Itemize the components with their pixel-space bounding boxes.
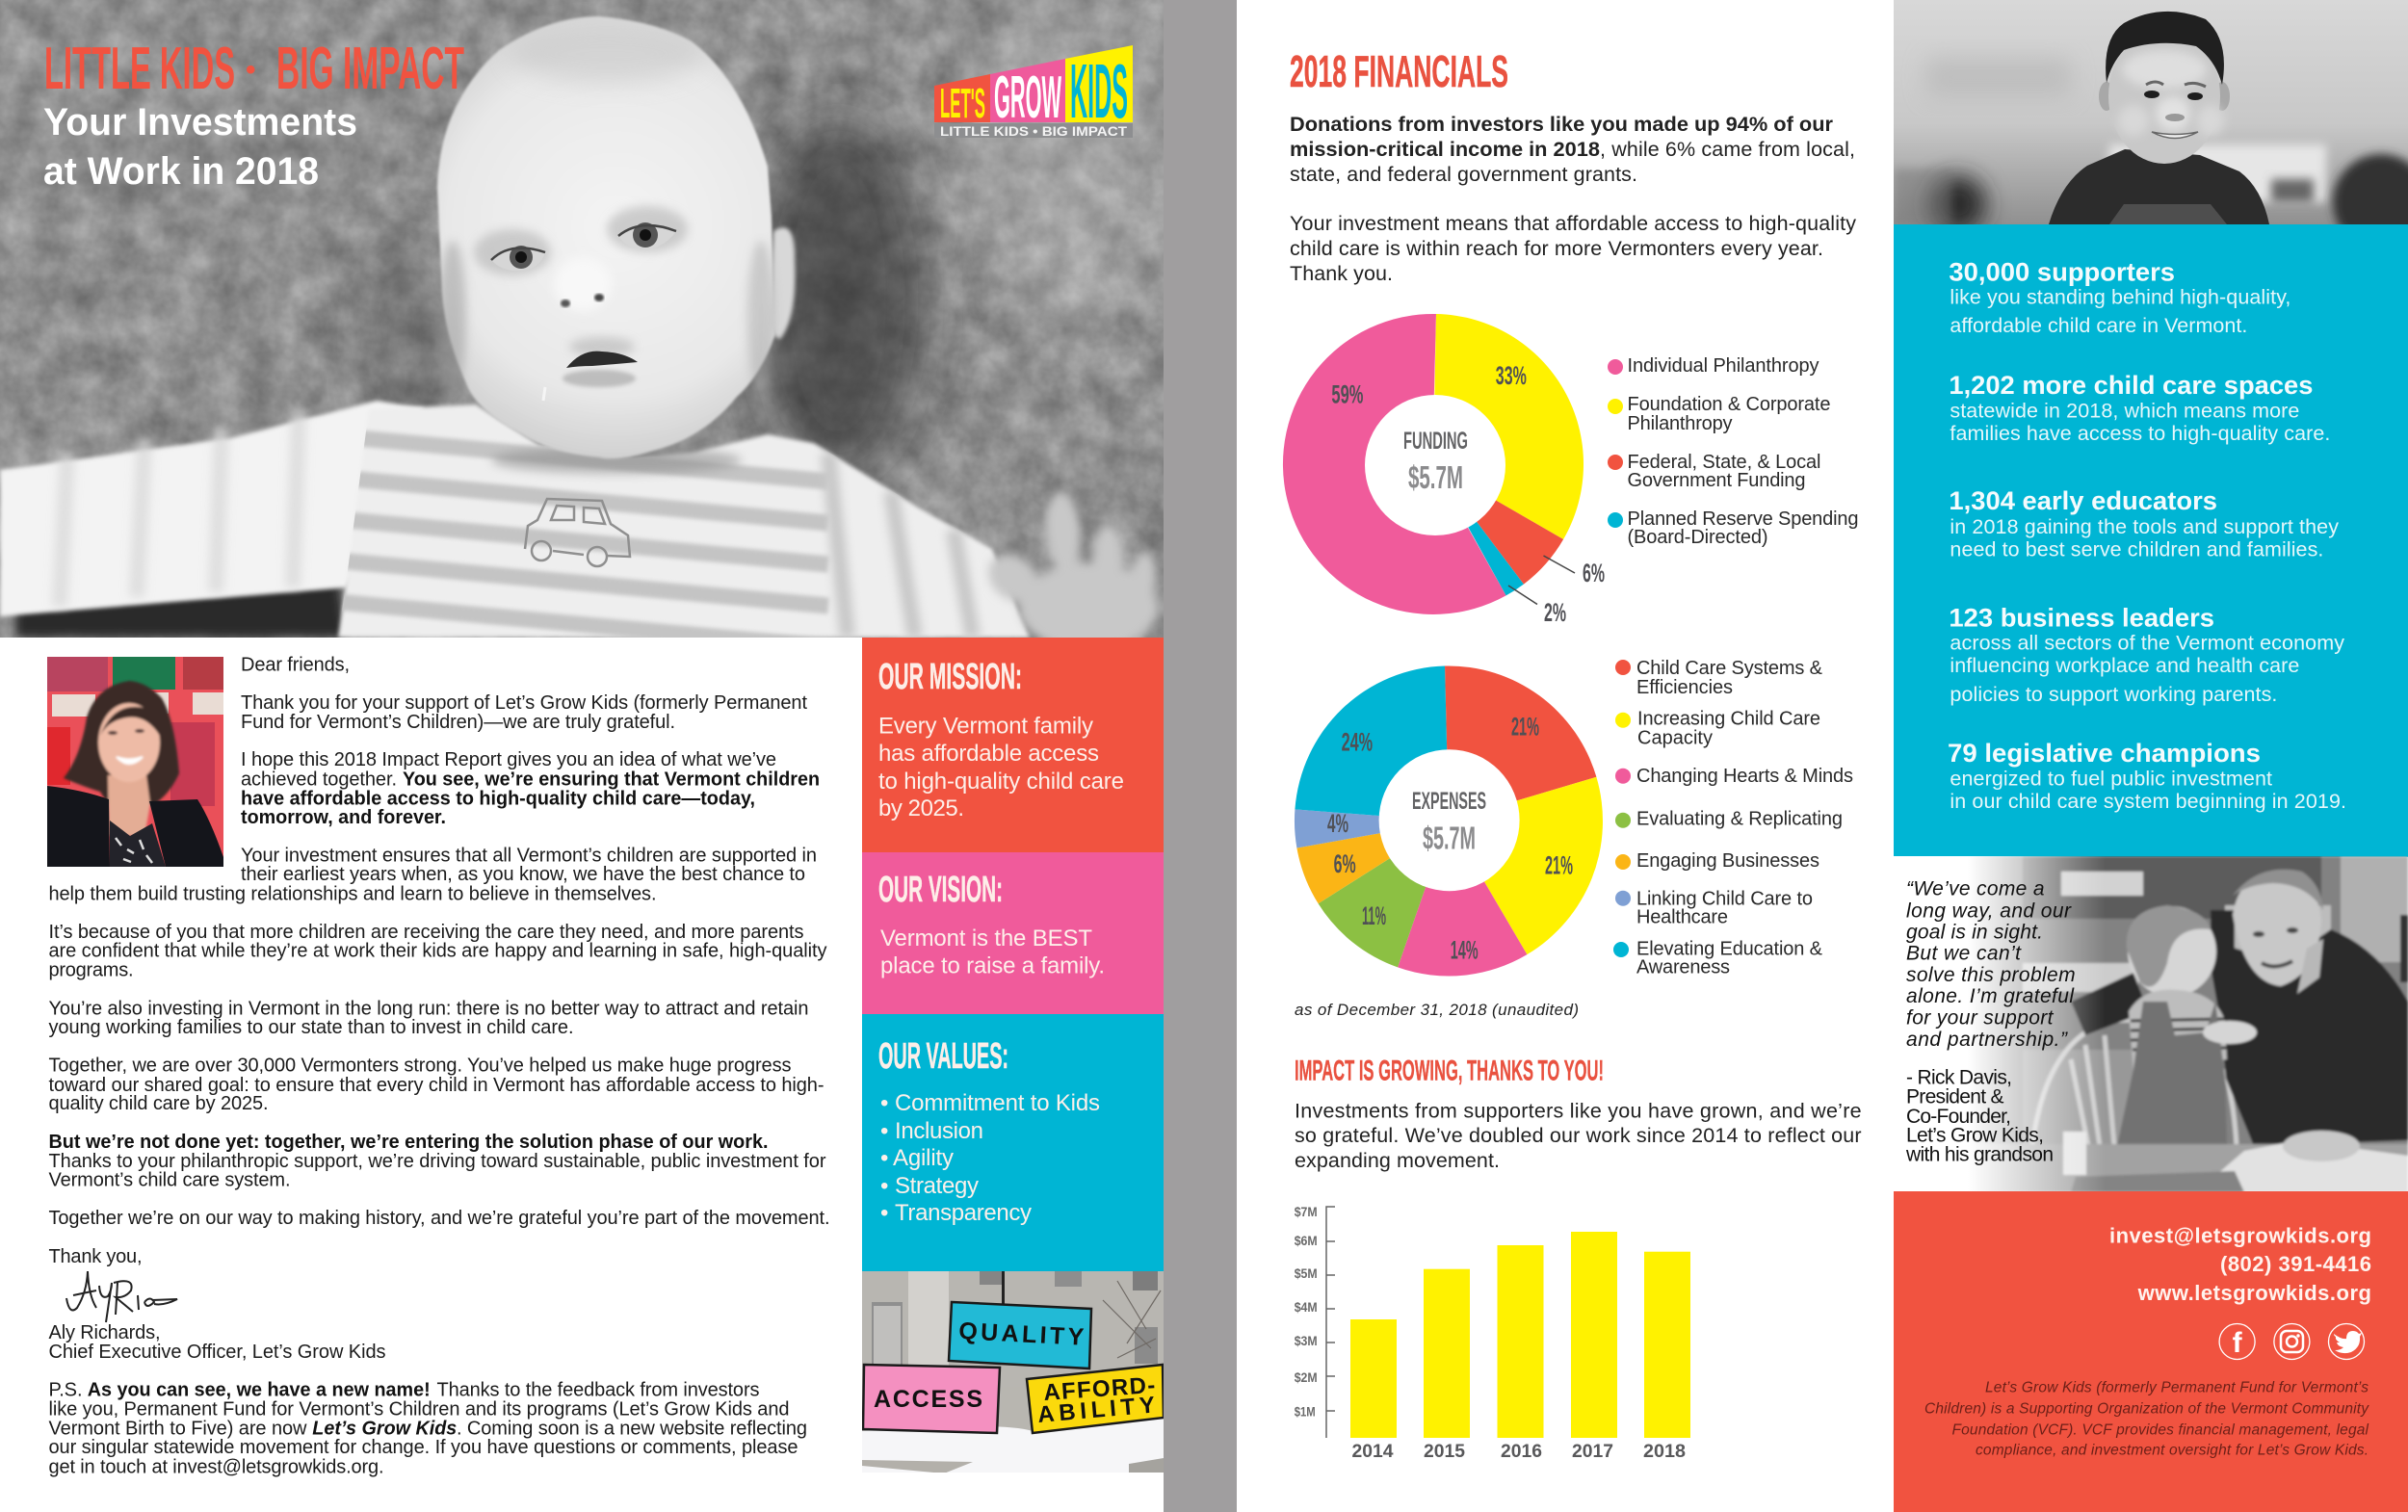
logo: Let's Grow Kids: LET'S [940, 80, 985, 127]
slice values: 24% [1342, 727, 1373, 756]
note: unaudited: as of December 31, 2018 (unaudited) [1295, 1001, 1579, 1019]
child's clothes [2129, 990, 2227, 1074]
paragraph: investing in Vermont: You’re also investing in Vermont in the long run: there is no better way to attract and retain [48, 998, 809, 1019]
paragraph: together: Together, we are over 30,000 Vermonters strong. You’ve helped us make huge progress [48, 1056, 792, 1077]
panel: our values: OUR VALUES: [878, 1036, 1008, 1077]
quote: Rick Davis: long way, and our [1906, 900, 2072, 923]
paragraph: thanks [241, 692, 807, 733]
legend: expenses: Changing Hearts & Minds [1636, 766, 1853, 787]
paragraph: solution phase [48, 1132, 826, 1191]
panel: our vision: OUR VISION: [878, 870, 1003, 910]
axis [1295, 1205, 1335, 1438]
panel: our values: Transparency [895, 1200, 1032, 1226]
stat: 123 business leaders: influencing workplace and health care [1950, 654, 2299, 677]
sign: quality: QUALITY [958, 1317, 1085, 1351]
slice values: 33% [1496, 361, 1527, 390]
postscript: Let’s Grow Kids [312, 1418, 457, 1439]
photo: baby on carpet [0, 0, 1175, 651]
sign: affordability: AFFORD- [1043, 1372, 1156, 1406]
legend: funding: Government Funding [1628, 470, 1805, 491]
attribution: Co-Founder, [1906, 1106, 2011, 1128]
axis: $6M [1295, 1234, 1318, 1248]
paragraph: solution phase: But we’re not done yet: together, we’re entering the solution phase of our work. [48, 1132, 769, 1153]
text: investments paragraph [1295, 1100, 1862, 1172]
greeting: Dear friends, [241, 655, 350, 676]
panel: our mission: Every Vermont family [878, 713, 1093, 740]
paragraph: your investment: Your investment ensures that all Vermont’s children are supported in [241, 846, 817, 867]
stat: 123 business leaders [1949, 603, 2344, 706]
quote: Rick Davis: and partnership.” [1906, 1029, 2068, 1051]
panel: our values: Inclusion [895, 1118, 983, 1144]
quote: Rick Davis: for your support [1906, 1007, 2055, 1029]
legend: expenses: Healthcare [1636, 906, 1728, 927]
legend: funding: (Board-Directed) [1628, 527, 1768, 548]
stat: 1,202 more child care spaces: statewide in 2018, which means more [1950, 399, 2299, 422]
paragraph: investing in Vermont: young working families to our state than to invest in child care. [48, 1017, 574, 1038]
stat: 1,304 early educators: 1,304 early educators [1949, 486, 2217, 515]
paragraph: impact report: You see, we’re ensuring that Vermont children [403, 769, 820, 790]
panel: contact [1894, 1191, 2408, 1512]
panel: our mission: by 2025. [878, 795, 964, 821]
disclaimer: Children) is a Supporting Organization of the Vermont Community [1924, 1401, 2369, 1418]
icon: facebook: f [2233, 1327, 2243, 1359]
stat: 1,202 more child care spaces: families have access to high-quality care. [1950, 422, 2330, 445]
text: donations paragraph: Donations from investors like you made up 94% of our [1290, 113, 1834, 136]
stat: 1,304 early educators: in 2018 gaining the tools and support they [1950, 515, 2339, 538]
portrait: Aly Richards [47, 657, 223, 867]
year labels [1352, 1442, 1686, 1462]
fade to white behind quote [1894, 856, 2106, 1192]
panel: impact statistics [1894, 224, 2408, 857]
paragraph: because of you: It’s because of you that more children are receiving the care they need, and more parents [48, 922, 803, 943]
disclaimer: compliance, and investment oversight for Let’s Grow Kids. [1976, 1443, 2369, 1459]
heading: 2018 financials: 2018 FINANCIALS [1290, 46, 1508, 96]
legend: expenses: Awareness [1636, 957, 1730, 978]
contact details [2109, 1224, 2371, 1305]
legend: expenses: Linking Child Care to [1636, 888, 1813, 909]
paragraph: making history: Together we’re on our way to making history, and we’re grateful you’re part of the movement. [48, 1208, 830, 1229]
title: Little Kids Big Impact: LITTLE KIDS [44, 36, 235, 102]
panel: our mission: OUR MISSION: [878, 657, 1022, 697]
postscript: P.S. [48, 1379, 83, 1400]
child's head [2128, 906, 2216, 997]
photo: protest signs in snow [862, 1271, 1164, 1473]
paragraph: impact report: achieved together. [241, 769, 397, 790]
sign: quality [949, 1302, 1091, 1369]
boy face [2108, 43, 2220, 164]
icon: twitter [2329, 1323, 2364, 1360]
subtitle: Your Investments [43, 101, 357, 143]
donut chart: funding [1283, 314, 1605, 627]
centre label: $5.7M [1408, 459, 1463, 495]
slice values: 21% [1511, 712, 1539, 741]
paragraph: your investment: help them build trusting relationships and learn to believe in themselves. [48, 884, 657, 905]
subtitle [43, 101, 357, 193]
stat: 79 legislative champions: 79 legislative champions [1948, 739, 2261, 768]
legend: funding: Individual Philanthropy [1628, 355, 1819, 377]
panel: our mission: has affordable access [878, 741, 1099, 767]
centre gutter [1164, 0, 1237, 1512]
contact details: (802) 391-4416 [2220, 1252, 2371, 1276]
table with map and books [2003, 1142, 2408, 1191]
centre label [1412, 788, 1486, 856]
sign: access [863, 1365, 1000, 1433]
panel: our values: • [880, 1090, 888, 1116]
legend: funding: Philanthropy [1628, 413, 1732, 434]
paragraph: impact report: I hope this 2018 Impact Report gives you an idea of what we’ve [241, 749, 776, 770]
panel: our mission: to high-quality child care [878, 769, 1124, 795]
sign: affordability [1027, 1365, 1164, 1433]
text: investments paragraph: Investments from supporters like you have grown, and we’re [1295, 1100, 1862, 1123]
text: investments paragraph: expanding movement. [1295, 1149, 1500, 1172]
panel: our values: • [880, 1200, 888, 1226]
legend: expenses: Child Care Systems & [1636, 658, 1823, 679]
stat: 79 legislative champions: in our child care system beginning in 2019. [1950, 790, 2346, 813]
legend: funding: Planned Reserve Spending [1628, 508, 1859, 530]
slice values: 6% [1583, 559, 1605, 587]
paragraph: because of you: programs. [48, 959, 133, 980]
signature scribble [66, 1271, 177, 1322]
panel: our vision: place to raise a family. [880, 953, 1105, 978]
logo: Let's Grow Kids: LITTLE KIDS • BIG IMPACT [940, 123, 1127, 139]
stat: 30,000 supporters: affordable child care in Vermont. [1950, 314, 2247, 337]
text: KIDS [1070, 48, 1128, 134]
stat: 1,304 early educators: need to best serve children and families. [1950, 537, 2323, 560]
title: Little Kids Big Impact: • [246, 54, 256, 86]
man's head [2233, 871, 2321, 986]
bars [1350, 1232, 1690, 1438]
panel: our values: Agility [893, 1145, 954, 1171]
stat: 30,000 supporters [1949, 258, 2290, 337]
text: investment paragraph: Your investment means that affordable access to high-quality [1290, 212, 1856, 235]
panel: our values: • [880, 1173, 888, 1199]
boy ears [2099, 82, 2109, 111]
axis: $1M [1295, 1404, 1316, 1420]
baby nose and mouth [543, 257, 638, 401]
quote: Rick Davis: goal is in sight. [1906, 922, 2043, 944]
legend: funding [1608, 355, 1859, 548]
stat: 79 legislative champions: energized to fuel public investment [1950, 768, 2272, 791]
year labels: 2014 [1352, 1442, 1394, 1462]
paragraph: together [48, 1056, 824, 1114]
signatory [48, 1322, 385, 1363]
quote: Rick Davis: But we can’t [1906, 943, 2022, 965]
year labels: 2015 [1424, 1442, 1465, 1462]
panel: our values: • [880, 1118, 888, 1144]
slice values: 2% [1544, 598, 1566, 627]
boy shirt [2049, 149, 2269, 224]
paragraph: because of you: are confident that while they’re at work their kids are happy and learning in safe, high-quality [48, 941, 826, 962]
legend: expenses: Elevating Education & [1636, 939, 1823, 960]
postscript: like you, Permanent Fund for Vermont’s Children and its programs (Let’s Grow Kids and [48, 1399, 790, 1421]
logo: Let's Grow Kids [934, 45, 1133, 139]
legend: expenses [1613, 658, 1853, 978]
attribution: President & [1906, 1085, 2003, 1108]
baby eyes [474, 206, 688, 275]
centre label [1403, 428, 1468, 495]
year labels: 2018 [1643, 1442, 1686, 1462]
paragraph: together: toward our shared goal: to ensure that every child in Vermont has affordable access to high- [48, 1075, 824, 1096]
attribution: - Rick Davis, [1906, 1067, 2012, 1089]
letter text [48, 655, 830, 1477]
quote: Rick Davis: “We’ve come a [1906, 878, 2044, 900]
text: investment paragraph [1290, 212, 1856, 285]
panel: our values [862, 1014, 1164, 1271]
year labels: 2016 [1501, 1442, 1542, 1462]
quote: Rick Davis: solve this problem [1906, 964, 2076, 986]
paragraph: impact report: have affordable access to high-quality child care—today, [241, 788, 755, 809]
paragraph: solution phase: Thanks to your philanthropic support, we’re driving toward sustainable, public investment for [48, 1151, 826, 1172]
paragraph: your investment: their earliest years when, as you know, we have the best chance to [241, 864, 805, 885]
slice values: 6% [1334, 849, 1356, 878]
text: investment paragraph: child care is within reach for more Vermonters every year. [1290, 237, 1823, 260]
axis: $7M [1295, 1205, 1318, 1219]
signatory: Aly Richards, [48, 1322, 160, 1343]
title: Little Kids Big Impact: BIG IMPACT [276, 36, 464, 102]
panel: our values: Strategy [895, 1173, 979, 1199]
postscript: Vermont Birth to Five) are now [48, 1418, 307, 1439]
postscript: get in touch at invest@letsgrowkids.org. [48, 1456, 383, 1477]
quote: Rick Davis: alone. I’m grateful [1906, 985, 2075, 1007]
text: investment paragraph: Thank you. [1290, 262, 1393, 285]
paragraph: together: quality child care by 2025. [48, 1093, 268, 1114]
paragraph: because of you [48, 922, 826, 980]
bar chart: annual budget 2014-2018 [1295, 1205, 1690, 1462]
paragraph: thanks: Fund for Vermont’s Children)—we are truly grateful. [241, 712, 675, 733]
photo: Rick Davis with grandson [1894, 856, 2408, 1192]
panel: our vision [862, 852, 1164, 1014]
paragraph: thanks: Thank you for your support of Let’s Grow Kids (formerly Permanent [241, 692, 807, 714]
postscript [48, 1379, 807, 1477]
postscript: . Coming soon is a new website reflecting [457, 1418, 807, 1439]
panel: our vision: Vermont is the BEST [880, 925, 1092, 952]
sign: affordability: ABILITY [1036, 1392, 1156, 1428]
legend: expenses: Capacity [1637, 728, 1713, 749]
slice values: 21% [1545, 851, 1573, 880]
centre label: FUNDING [1403, 428, 1468, 455]
axis: $4M [1295, 1300, 1318, 1315]
stat: 1,202 more child care spaces: 1,202 more child care spaces [1949, 371, 2313, 400]
stat: 123 business leaders: policies to support working parents. [1950, 683, 2277, 706]
slice values: 4% [1327, 809, 1348, 838]
slice values: 11% [1362, 901, 1386, 930]
axis: $2M [1295, 1370, 1318, 1385]
sign: access: ACCESS [874, 1386, 982, 1413]
legend: expenses: Efficiencies [1636, 677, 1733, 698]
logo: Let's Grow Kids: GROW [994, 65, 1061, 131]
icon: facebook [2219, 1323, 2255, 1360]
icon: instagram [2274, 1323, 2310, 1360]
contact details: invest@letsgrowkids.org [2109, 1224, 2371, 1248]
boy features [2144, 82, 2206, 139]
text: donations paragraph [1290, 113, 1855, 186]
stat: 123 business leaders: across all sectors of the Vermont economy [1950, 632, 2344, 655]
paragraph: impact report [241, 749, 820, 828]
attribution [1905, 1067, 2054, 1166]
man's sweater [2071, 929, 2408, 1146]
slice values: 14% [1451, 936, 1479, 965]
quote: Rick Davis [1905, 878, 2076, 1166]
stat: 30,000 supporters: 30,000 supporters [1949, 258, 2175, 287]
boy hair [2106, 12, 2224, 85]
disclaimer: Foundation (VCF). VCF provides financial management, legal [1951, 1422, 2369, 1439]
centre label: $5.7M [1423, 821, 1476, 856]
legend: expenses: Evaluating & Replicating [1636, 809, 1843, 830]
heading: impact is growing: IMPACT IS GROWING, THANKS TO YOU! [1295, 1056, 1604, 1087]
year labels: 2017 [1572, 1442, 1613, 1462]
axis: $3M [1295, 1334, 1318, 1348]
postscript: our singular statewide movement for change. If you have questions or comments, please [48, 1437, 798, 1458]
disclaimer: Let’s Grow Kids (formerly Permanent Fund for Vermont’s [1985, 1380, 2369, 1396]
baby hand [979, 490, 1162, 651]
legend: expenses: Engaging Businesses [1636, 850, 1819, 872]
signatory: Chief Executive Officer, Let’s Grow Kids [48, 1342, 385, 1363]
stat: 1,304 early educators [1949, 486, 2339, 560]
postscript: As you can see, we have a new name! [88, 1379, 431, 1400]
text: investments paragraph: so grateful. We’ve doubled our work since 2014 to reflect our [1295, 1124, 1862, 1147]
axis: $5M [1295, 1266, 1318, 1281]
legend: funding: Federal, State, & Local [1628, 452, 1820, 473]
text: donations paragraph: state, and federal government grants. [1290, 163, 1637, 186]
stat: 79 legislative champions [1948, 739, 2346, 813]
attribution: Let’s Grow Kids, [1906, 1125, 2044, 1146]
paragraph: impact report: tomorrow, and forever. [241, 807, 446, 828]
attribution: with his grandson [1905, 1144, 2054, 1166]
donut chart: expenses [1295, 665, 1603, 976]
slice values: 59% [1331, 379, 1363, 408]
panel: our mission [862, 638, 1164, 852]
paragraph: investing in Vermont [48, 998, 809, 1038]
stat: 123 business leaders: 123 business leaders [1949, 603, 2214, 632]
legend: expenses: Increasing Child Care [1637, 709, 1820, 730]
legend: funding: Foundation & Corporate [1628, 394, 1830, 415]
slice values [1327, 712, 1573, 965]
panel: our values: Commitment to Kids [895, 1090, 1100, 1116]
subtitle: at Work in 2018 [43, 150, 319, 193]
slice values [1331, 361, 1605, 627]
text: donations paragraph: , while 6% came from local, [1600, 138, 1855, 161]
centre label: EXPENSES [1412, 788, 1486, 815]
paragraph: solution phase: Vermont’s child care system. [48, 1170, 291, 1191]
sign-off: Thank you, [48, 1246, 143, 1267]
contact details: www.letsgrowkids.org [2137, 1281, 2371, 1305]
stat: 1,202 more child care spaces [1949, 371, 2330, 445]
paragraph: your investment [48, 846, 817, 905]
panel: our values: • [880, 1145, 888, 1171]
postscript: Thanks to the feedback from investors [437, 1379, 759, 1400]
text: donations paragraph: mission-critical income in 2018 [1290, 138, 1600, 161]
stat: 30,000 supporters: like you standing behind high-quality, [1950, 285, 2290, 308]
car emblem on onesie [525, 499, 630, 566]
chair back [2032, 1019, 2237, 1146]
disclaimer [1924, 1380, 2369, 1459]
photo: smiling boy [1894, 0, 2408, 224]
